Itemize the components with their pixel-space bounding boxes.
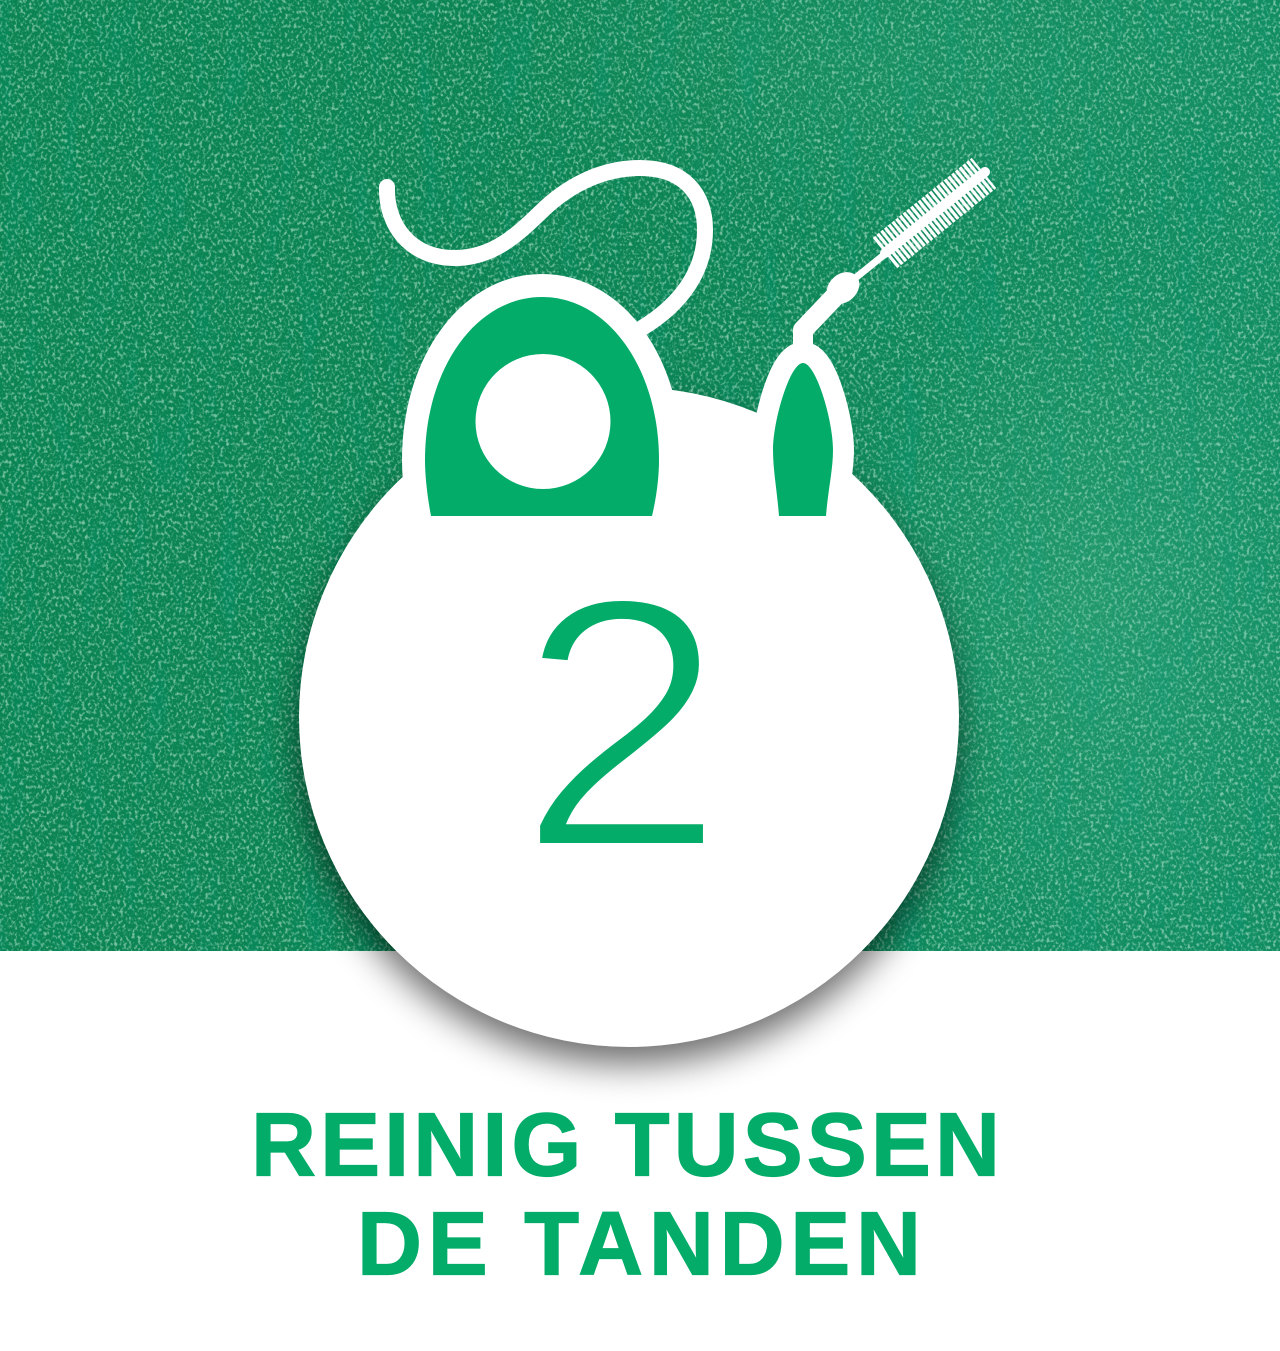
icon: floss dispenser bbox=[425, 297, 659, 516]
title: DE TANDEN bbox=[357, 1194, 921, 1294]
title bbox=[251, 1096, 1000, 1294]
white number circle bbox=[299, 387, 959, 1047]
icon: floss string bbox=[387, 168, 705, 328]
title: REINIG TUSSEN bbox=[251, 1096, 1000, 1196]
icon: interdental brush bbox=[773, 172, 985, 516]
circle drop shadow bbox=[301, 408, 957, 1064]
textured green background bbox=[0, 0, 1280, 951]
step number: 2 bbox=[517, 523, 726, 923]
